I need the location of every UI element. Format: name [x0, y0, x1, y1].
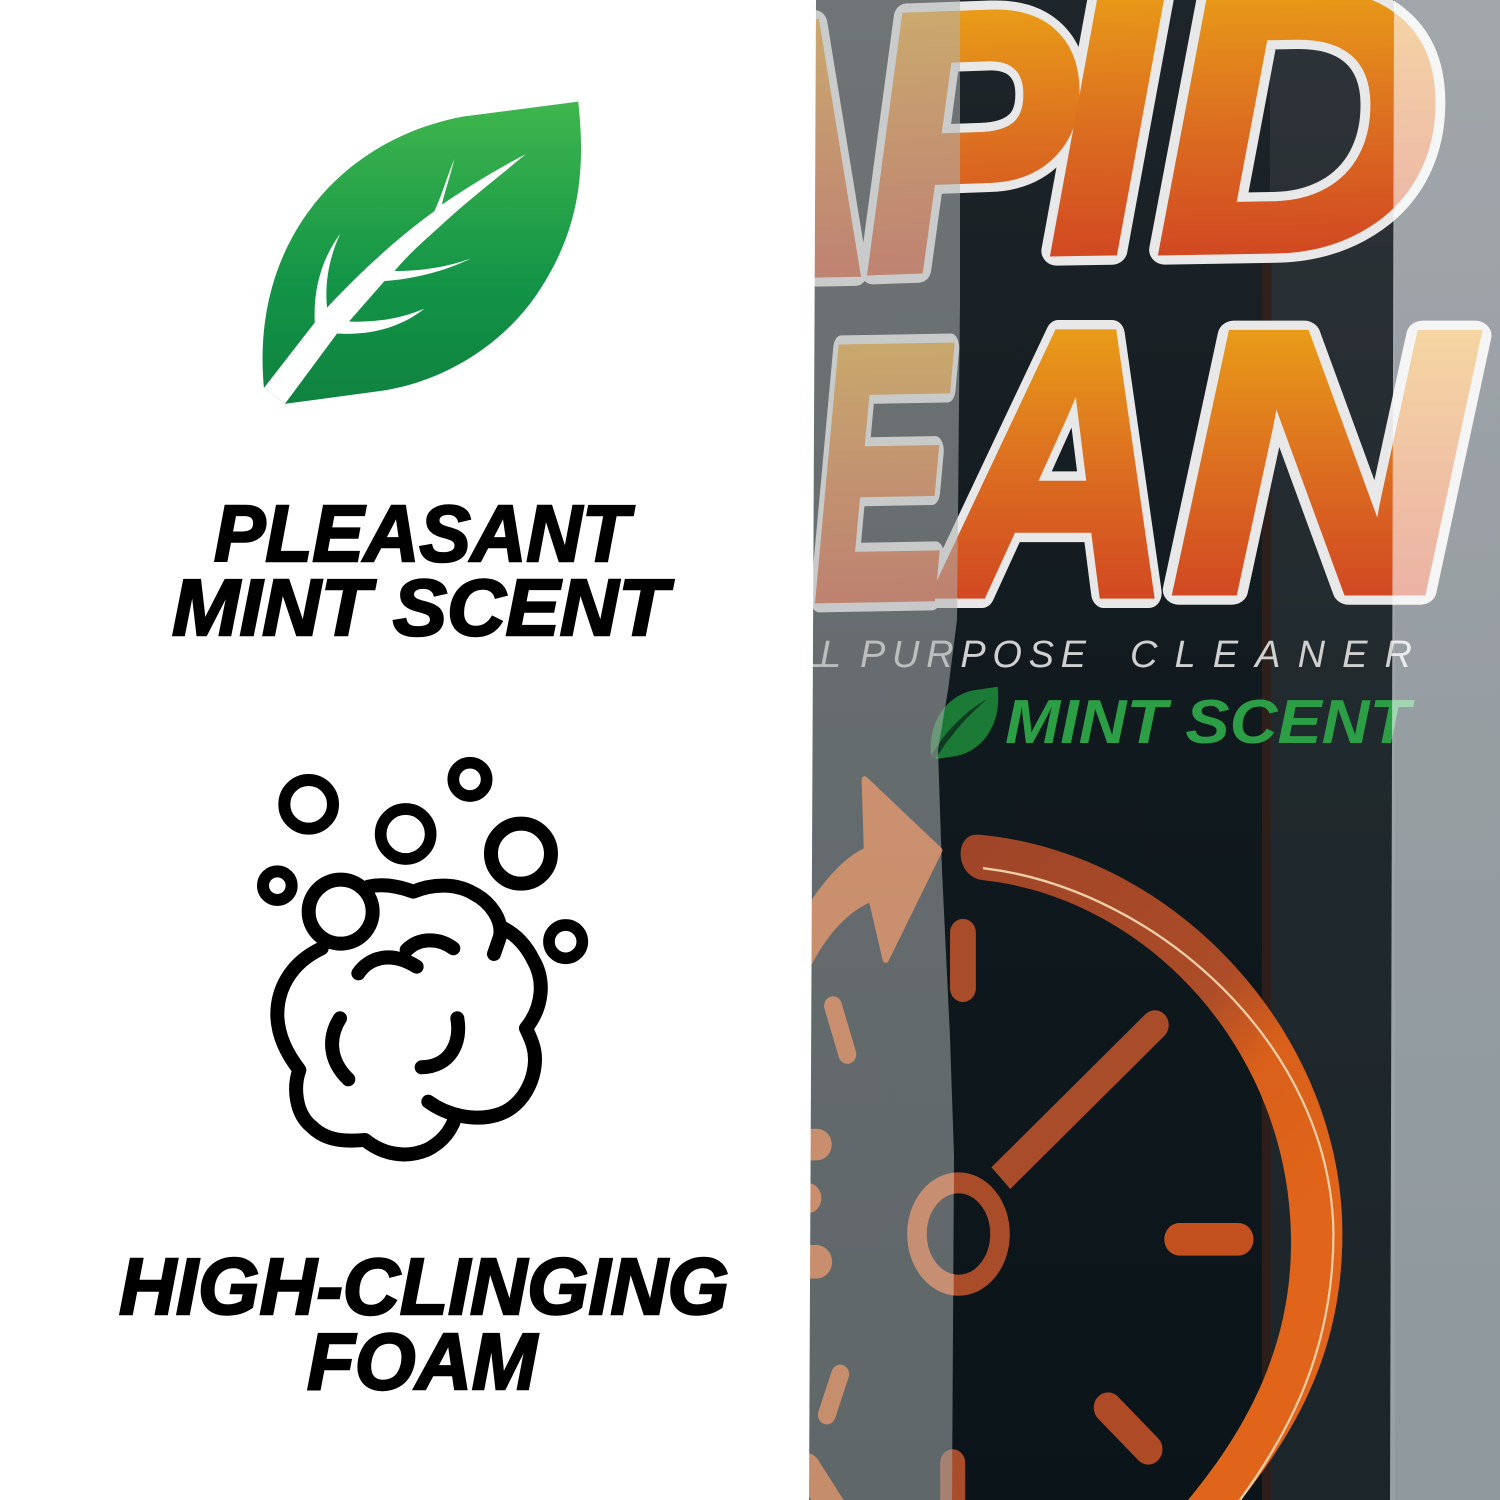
heading: pleasant mint scent	[172, 489, 674, 652]
bottle label: all purpose cleaner: ALL	[781, 634, 841, 676]
bottle label word: clean: E	[809, 269, 959, 674]
reflection: left grey band	[800, 0, 960, 1500]
heading: high-clinging foam: HIGH-CLINGING	[119, 1242, 729, 1331]
bottle label word: rapid	[814, 0, 1446, 287]
bottle label: all purpose cleaner: CLEANER	[1130, 634, 1412, 676]
bottle label: small leaf	[931, 687, 998, 759]
bottle label word: clean: E	[809, 269, 959, 674]
bottle label word: clean: N	[1172, 255, 1479, 669]
bottle label word: clean	[813, 320, 1492, 612]
bottle label word: clean: A	[933, 254, 1172, 673]
bottle label: all purpose cleaner: PURPOSE	[860, 634, 1087, 676]
bottle label: mint scent: MINT SCENT	[1005, 688, 1415, 757]
reflection: right grey band	[1390, 0, 1500, 1500]
heading: high-clinging foam: FOAM	[307, 1317, 539, 1406]
icon: green leaf	[263, 102, 581, 404]
panel: bottle photo	[809, 0, 1500, 1500]
heading: pleasant mint scent: MINT SCENT	[172, 563, 674, 652]
bottle label word: clean: N	[1172, 255, 1479, 669]
icon: foam bubbles	[263, 763, 582, 1154]
heading: high-clinging foam	[119, 1242, 729, 1406]
clock hub	[917, 1183, 1000, 1285]
arrow	[804, 780, 939, 963]
heading: pleasant mint scent: PLEASANT	[214, 489, 635, 578]
bottle label word: clean: A	[933, 254, 1172, 673]
clock hand	[1001, 1010, 1169, 1178]
clock ticks	[800, 933, 1238, 1500]
clock rim	[961, 835, 1342, 1500]
bottle label: clock icon	[800, 780, 1342, 1500]
bottle label: all purpose cleaner	[812, 640, 1411, 668]
